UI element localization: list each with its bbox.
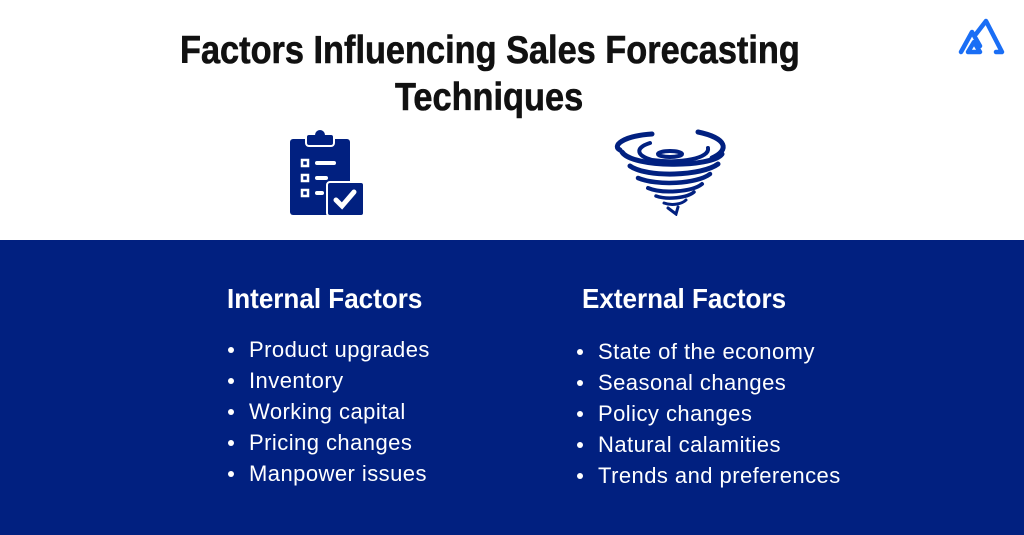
list: internal: Inventory: [249, 368, 344, 393]
list: external: Natural calamities: [598, 432, 781, 457]
list: external: Trends and preferences: [598, 463, 841, 488]
list: internal: Working capital: [249, 399, 406, 424]
title: Techniques: [395, 76, 583, 119]
list: internal: Product upgrades: [249, 337, 430, 362]
list: external: State of the economy: [598, 339, 815, 364]
logo: [958, 18, 1004, 54]
panel: factors: [0, 240, 1024, 535]
heading: internal factors: Internal Factors: [227, 283, 422, 314]
heading: external factors: External Factors: [582, 283, 786, 314]
title: [180, 29, 800, 119]
list: internal: Pricing changes: [249, 430, 412, 455]
list: external: [577, 339, 841, 488]
list: internal: [228, 337, 430, 486]
list: external: Policy changes: [598, 401, 752, 426]
list: internal: Manpower issues: [249, 461, 427, 486]
title: Factors Influencing Sales Forecasting: [180, 29, 800, 72]
icon: clipboard: [290, 130, 363, 215]
icon: tornado: [614, 130, 726, 216]
list: external: Seasonal changes: [598, 370, 786, 395]
